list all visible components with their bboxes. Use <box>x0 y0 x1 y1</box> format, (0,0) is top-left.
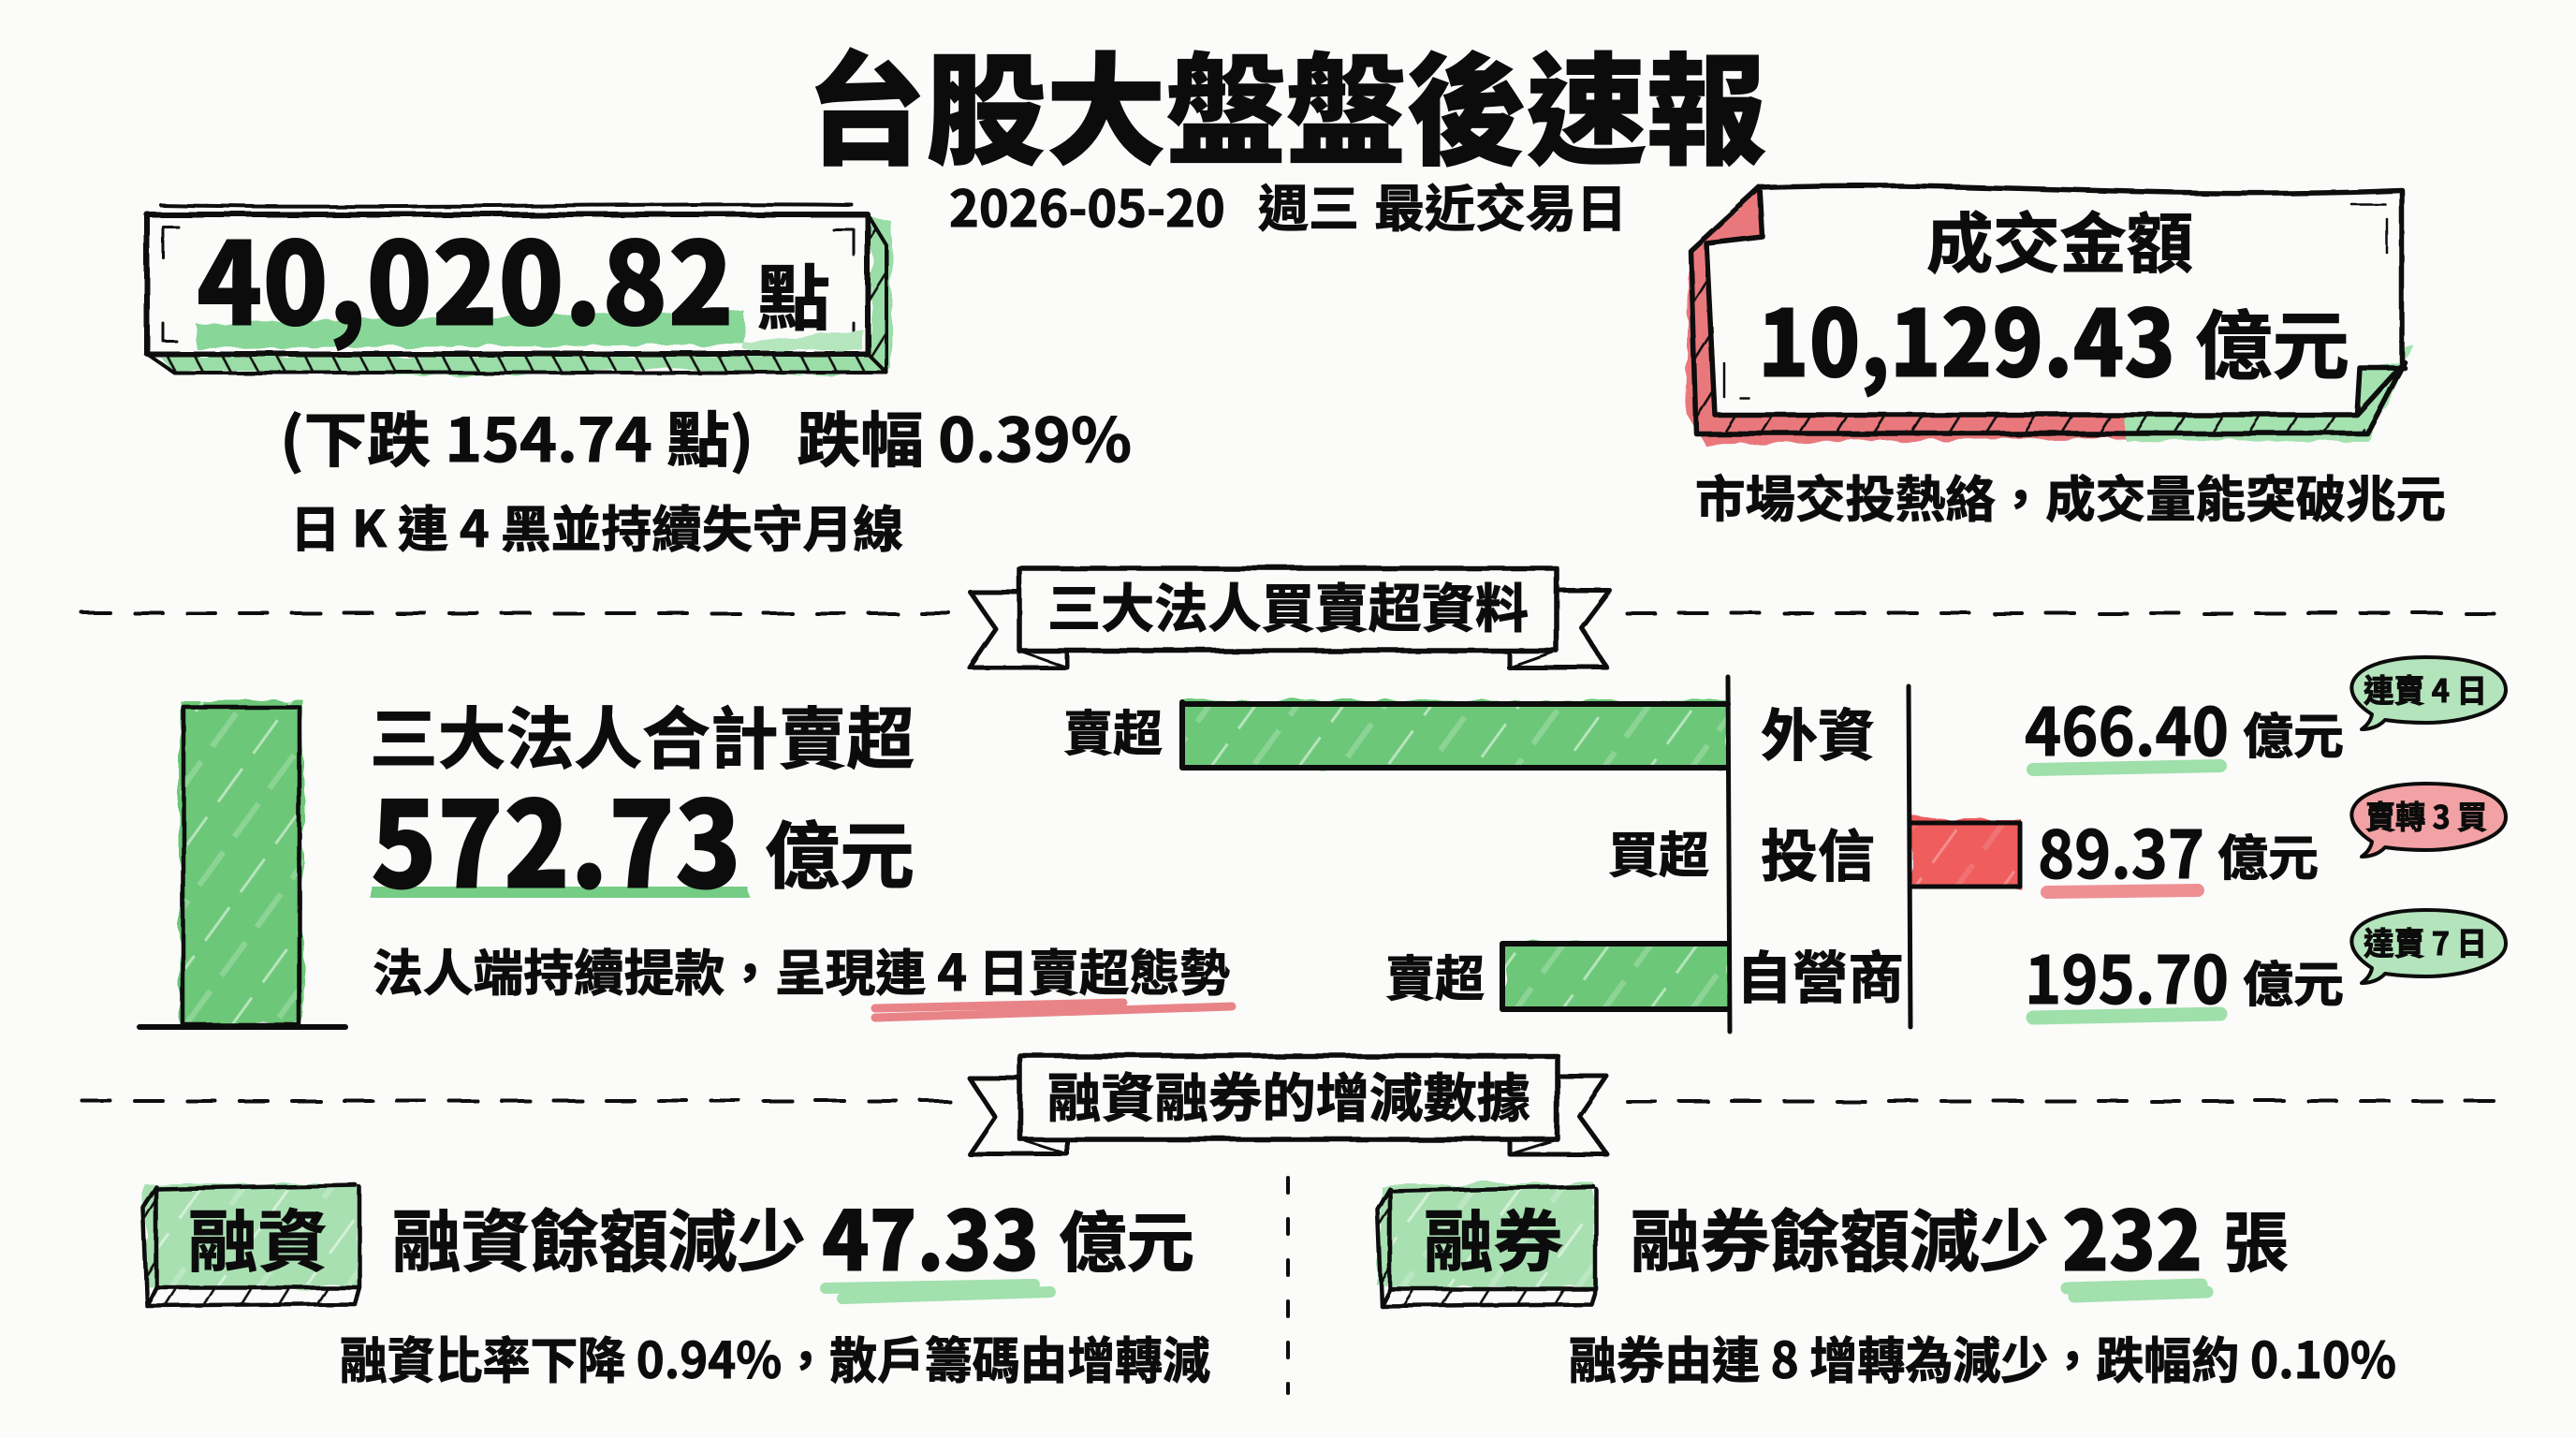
margin underline <box>826 1284 1050 1299</box>
row label: foreign: 外資 <box>1761 691 1875 772</box>
total note: 法人端持續提款，呈現連 4 日賣超態勢 <box>373 934 1230 1005</box>
index unit: 點 <box>757 242 830 345</box>
total unit: 億元 <box>765 799 915 903</box>
short underline <box>2067 1284 2207 1297</box>
unit: foreign: 億元 <box>2243 697 2344 768</box>
callout: trust switch: 賣轉 3 買 <box>2365 792 2487 838</box>
margin unit: 億元 <box>1059 1191 1194 1285</box>
ribbon shape <box>970 1056 1607 1154</box>
date subtitle: 週三 <box>1258 168 1359 242</box>
panel: margin financing <box>143 1176 1210 1393</box>
callout: dealer streak: 達賣 7 日 <box>2364 918 2487 964</box>
underline: foreign <box>2033 766 2220 770</box>
value: foreign: 466.40 <box>2025 681 2229 775</box>
turnover value: 10,129.43 <box>1758 271 2175 404</box>
bar: dealer <box>1502 942 1728 1009</box>
short unit: 張 <box>2223 1191 2289 1285</box>
short note: 融券由連 8 增轉為減少，跌幅約 0.10% <box>1569 1322 2396 1393</box>
panel: short selling <box>1378 1176 2396 1393</box>
total value: 572.73 <box>371 750 741 922</box>
ribbon: margin section heading <box>970 1056 1607 1154</box>
underline: trust <box>2047 890 2198 892</box>
axis lines <box>1728 677 1910 1032</box>
turnover note: 市場交投熱絡，成交量能突破兆元 <box>1695 461 2446 532</box>
value: trust: 89.37 <box>2038 803 2204 898</box>
bar: foreign <box>1182 700 1728 768</box>
date subtitle: 最近交易日 <box>1374 168 1627 242</box>
badge: 融資 <box>188 1187 328 1285</box>
row label: dealer: 自營商 <box>1736 933 1904 1015</box>
badge <box>143 1184 359 1306</box>
total bar <box>139 700 345 1027</box>
turnover label: 成交金額 <box>1926 192 2193 286</box>
badge <box>1378 1184 1596 1306</box>
callout: foreign streak: 連賣 4 日 <box>2364 666 2487 712</box>
badge: 融券 <box>1424 1187 1563 1285</box>
ribbon text: 融資融券的增減數據 <box>1047 1057 1530 1133</box>
date subtitle: 2026-05-20 <box>949 168 1225 242</box>
underline: dealer <box>2033 1014 2220 1018</box>
green highlight under index <box>196 311 863 350</box>
unit: dealer: 億元 <box>2243 946 2344 1016</box>
callout: trust switch <box>2351 784 2506 857</box>
ribbon text: 三大法人買賣超資料 <box>1047 567 1529 643</box>
index note: 日 K 連 4 黑並持續失守月線 <box>290 491 903 562</box>
red and green wash on scroll <box>1685 192 2413 444</box>
row label: trust: 投信 <box>1761 812 1875 893</box>
value: dealer: 195.70 <box>2025 929 2229 1023</box>
short value: 232 <box>2062 1176 2203 1295</box>
callout: dealer streak <box>2351 910 2506 983</box>
title: 台股大盤盤後速報 <box>806 14 1766 190</box>
margin value: 47.33 <box>822 1176 1039 1295</box>
label: foreign sell: 賣超 <box>1063 695 1163 765</box>
margin note: 融資比率下降 0.94%，散戶籌碼由增轉減 <box>340 1322 1210 1393</box>
total note underline <box>875 1003 1232 1018</box>
bar: trust <box>1910 818 2020 888</box>
green wash behind index box <box>159 217 891 376</box>
ribbon shape <box>970 568 1609 668</box>
panel: index level <box>147 193 891 376</box>
callout: foreign streak <box>2351 657 2506 729</box>
label: trust buy: 買超 <box>1608 816 1709 887</box>
total heading: 三大法人合計賣超 <box>370 684 915 783</box>
turnover unit: 億元 <box>2195 286 2349 395</box>
panel: total net sell <box>139 684 1232 1027</box>
total value underline <box>373 888 749 897</box>
panel: turnover <box>1685 185 2413 444</box>
index box frame <box>147 204 886 373</box>
chart: institutional bars <box>1063 657 2506 1032</box>
label: dealer sell: 賣超 <box>1385 940 1485 1010</box>
scroll frame <box>1690 185 2405 433</box>
short heading: 融券餘額減少 <box>1631 1187 2049 1285</box>
unit: trust: 億元 <box>2217 819 2319 889</box>
index value: 40,020.82 <box>197 193 734 359</box>
index change: (下跌 154.74 點) 跌幅 0.39% <box>280 393 1132 479</box>
ribbon: institutional section heading <box>970 567 1609 668</box>
margin heading: 融資餘額減少 <box>392 1187 806 1285</box>
